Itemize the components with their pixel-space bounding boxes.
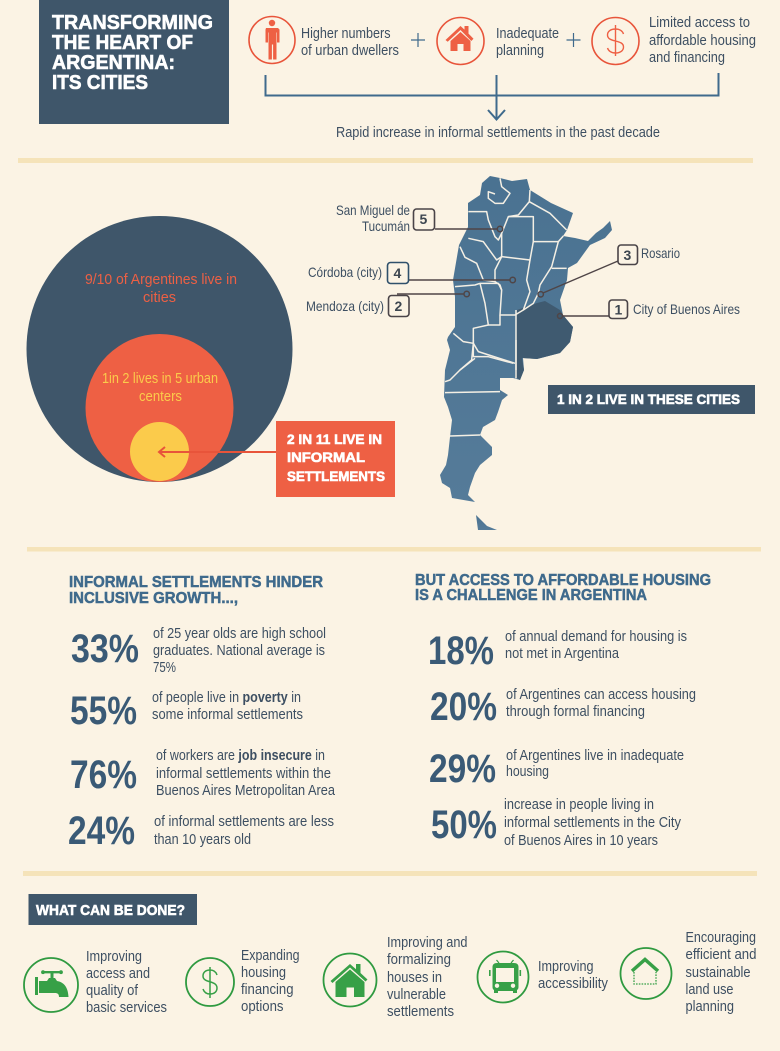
text: land use planning: planning [686,998,734,1015]
stat: 50%: informal settlements in the City [504,814,681,831]
callout: 2 in 11: 2 IN 11 LIVE IN [287,431,382,447]
text: higher numbers: Higher numbers [301,25,390,42]
icon: house [324,954,376,1006]
marker 2: Mendoza [306,291,469,316]
heading: what can be done [28,894,197,925]
text: accessibility [538,958,608,992]
heading: informal settlements: INFORMAL SETTLEMENTS HINDER [69,574,323,591]
heading: informal settlements [69,574,323,607]
marker 3: Rosario: 3 [624,247,632,263]
marker 4: Cordoba: Córdoba (city) [308,264,382,280]
text: land use planning: efficient and [686,946,756,963]
marker 5: San Miguel de Tucuman [336,202,503,234]
text: land use planning: sustainable [686,964,750,981]
callout: 1 in 2 live in these cities: 1 IN 2 LIVE IN THESE CITIES [557,391,740,407]
stat: 55%: of people live in poverty in [152,689,301,706]
text: rapid increase: Rapid increase in informal settlements in the past decade [336,124,660,141]
icon: bus [478,952,528,1002]
stat: 18%: not met in Argentina [505,645,620,662]
icon: land use house [620,948,672,999]
icon: plus [566,33,580,47]
stat: 50% [431,796,681,849]
title: ARGENTINA: [52,52,175,74]
title [39,0,229,124]
stat: 33%: 33% [71,627,139,671]
stat: 20% [430,685,696,729]
heading: affordable housing: BUT ACCESS TO AFFORDABLE HOUSING [415,572,711,589]
label: 9/10: cities [143,289,176,306]
heading: affordable housing: IS A CHALLENGE IN ARGENTINA [415,587,647,604]
stat: 18%: 18% [428,629,494,673]
label: 1 in 2: 1in 2 lives in 5 urban [102,370,218,387]
bracket arrow [266,73,718,120]
heading: what can be done: WHAT CAN BE DONE? [36,902,185,919]
stat: 33%: of 25 year olds are high school [153,625,326,642]
marker 1: City of Buenos Aires [558,300,740,318]
text: vulnerable settlements: settlements [387,1003,454,1020]
stat: 24%: than 10 years old [154,831,251,848]
text: accessibility: Improving [538,958,594,975]
stat: 18% [428,628,687,673]
marker 1: City of Buenos Aires: City of Buenos Aires [633,301,740,317]
text: higher numbers: of urban dwellers [301,42,399,59]
stat: 33% [71,625,326,676]
stat: 33%: graduates. National average is [153,642,325,659]
text: vulnerable settlements: formalizing [387,951,451,968]
marker 3: Rosario [538,245,680,297]
stat: 55% [70,689,303,733]
text: inadequate planning [496,25,559,59]
stat: 76% [70,747,336,799]
icon: dollar [592,18,639,64]
stat: 50%: increase in people living in [504,796,654,813]
label: 1 in 2: centers [139,388,182,405]
text: housing financing: options [241,998,284,1015]
icon: water tap [24,958,78,1012]
text: inadequate planning: planning [496,42,544,59]
title: THE HEART OF [52,32,193,54]
stat: 20%: 20% [430,685,497,729]
text: basic services: access and [86,965,150,982]
heading: informal settlements: INCLUSIVE GROWTH..., [69,590,238,607]
icon: dollar [186,958,234,1006]
text: inadequate planning: Inadequate [496,25,559,42]
text: basic services: basic services [86,999,167,1016]
stat: 29% [429,747,684,791]
stat: 76%: informal settlements within the [156,765,331,782]
stat: 50%: of Buenos Aires in 10 years [504,832,658,849]
text: housing financing: Expanding [241,947,300,964]
text: limited access [649,14,756,66]
text: land use planning: Encouraging [686,929,756,946]
marker 4: Cordoba [308,262,515,284]
map of Argentina [440,176,612,530]
icon: plus [411,33,425,47]
stat: 20%: through formal financing [506,703,645,720]
text: vulnerable settlements [387,934,468,1020]
marker 5: San Miguel de Tucuman: San Miguel de [336,202,410,218]
marker 3: Rosario: Rosario [641,245,680,261]
stat: 76%: Buenos Aires Metropolitan Area [156,782,336,799]
text: basic services: Improving [86,948,142,965]
text: limited access: Limited access to [649,14,750,31]
text: accessibility: accessibility [538,975,608,992]
text: housing financing [241,947,300,1015]
text: land use planning [686,929,756,1015]
stat: 20%: of Argentines can access housing [506,686,696,703]
text: basic services: quality of [86,982,139,999]
stat: 29%: 29% [429,747,496,791]
label: 9/10: 9/10 of Argentines live in [85,271,237,288]
label: 9/10 [85,271,237,306]
stat: 55%: 55% [70,689,137,733]
callout: 1 in 2 live in these cities [548,385,755,414]
icon: person [249,16,295,64]
heading: affordable housing [415,572,711,604]
stat: 50%: 50% [431,803,497,847]
stat: 24%: of informal settlements are less [154,813,334,830]
marker 4: Cordoba: 4 [394,265,402,281]
stat: 29%: housing [506,763,549,780]
text: housing financing: financing [241,981,294,998]
stat: 24%: 24% [68,809,135,853]
stat: 18%: of annual demand for housing is [505,628,687,645]
marker 1: City of Buenos Aires: 1 [614,302,622,318]
marker 2: Mendoza: Mendoza (city) [306,298,384,314]
marker 5: San Miguel de Tucuman: 5 [420,211,428,227]
text: vulnerable settlements: vulnerable [387,986,446,1003]
text: basic services [86,948,167,1016]
text: land use planning: land use [686,981,734,998]
text: higher numbers [301,25,399,59]
text: housing financing: housing [241,964,286,981]
marker 2: Mendoza: 2 [394,298,402,314]
text: vulnerable settlements: Improving and [387,934,468,951]
stat: 76%: 76% [70,753,137,797]
marker 5: San Miguel de Tucuman: Tucumán [362,218,410,234]
stat: 55%: some informal settlements [152,706,303,723]
nested circles chart [26,216,292,482]
title: TRANSFORMING [52,12,213,34]
stat: 76%: of workers are job insecure in [156,747,325,764]
stat: 24% [68,809,334,853]
callout: 2 in 11: SETTLEMENTS [287,468,385,484]
icon: house [437,18,484,64]
title: ITS CITIES [52,72,148,94]
text: vulnerable settlements: houses in [387,969,442,986]
stat: 33%: 75% [153,659,176,676]
callout: 2 in 11: INFORMAL [287,449,365,465]
arrow to informal settlements [159,447,276,457]
label: 1 in 2 [102,370,218,405]
callout: 2 in 11 [276,421,395,497]
text: limited access: affordable housing [649,32,756,49]
text: limited access: and financing [649,49,725,66]
stat: 29%: of Argentines live in inadequate [506,747,684,764]
